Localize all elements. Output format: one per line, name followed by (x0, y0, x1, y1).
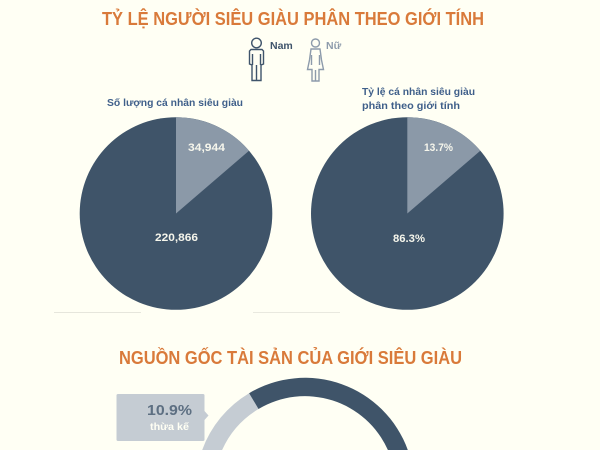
title: TỶ LỆ NGƯỜI SIÊU GIÀU PHÂN THEO GIỚI TÍNH (102, 8, 484, 29)
pie chart: count: 220,866 (155, 232, 198, 244)
pie chart: share: 86.3% (393, 233, 425, 245)
label: Nữ: Nữ (326, 40, 342, 52)
pie chart: count (80, 117, 272, 310)
legend: gender (250, 38, 342, 81)
callout: inheritance: 10.9% (147, 402, 192, 419)
heading: share pie: Tỷ lệ cá nhân siêu giàu (362, 86, 475, 98)
heading: count pie: Số lượng cá nhân siêu giàu (107, 97, 243, 109)
callout: inheritance (116, 394, 208, 441)
ring chart (202, 378, 408, 450)
icon: female figure (308, 39, 324, 81)
pie chart: count: 34,944 (188, 142, 226, 154)
heading: wealth source: NGUỒN GỐC TÀI SẢN CỦA GIỚI SIÊU GIÀU (119, 347, 462, 368)
pie chart: share: 13.7% (424, 142, 453, 154)
pie chart: share (311, 117, 504, 310)
label: Nam: Nam (270, 40, 293, 52)
callout: inheritance: thừa kế (150, 421, 189, 433)
icon: male figure (250, 38, 264, 80)
heading: share pie: phân theo giới tính (362, 100, 460, 112)
